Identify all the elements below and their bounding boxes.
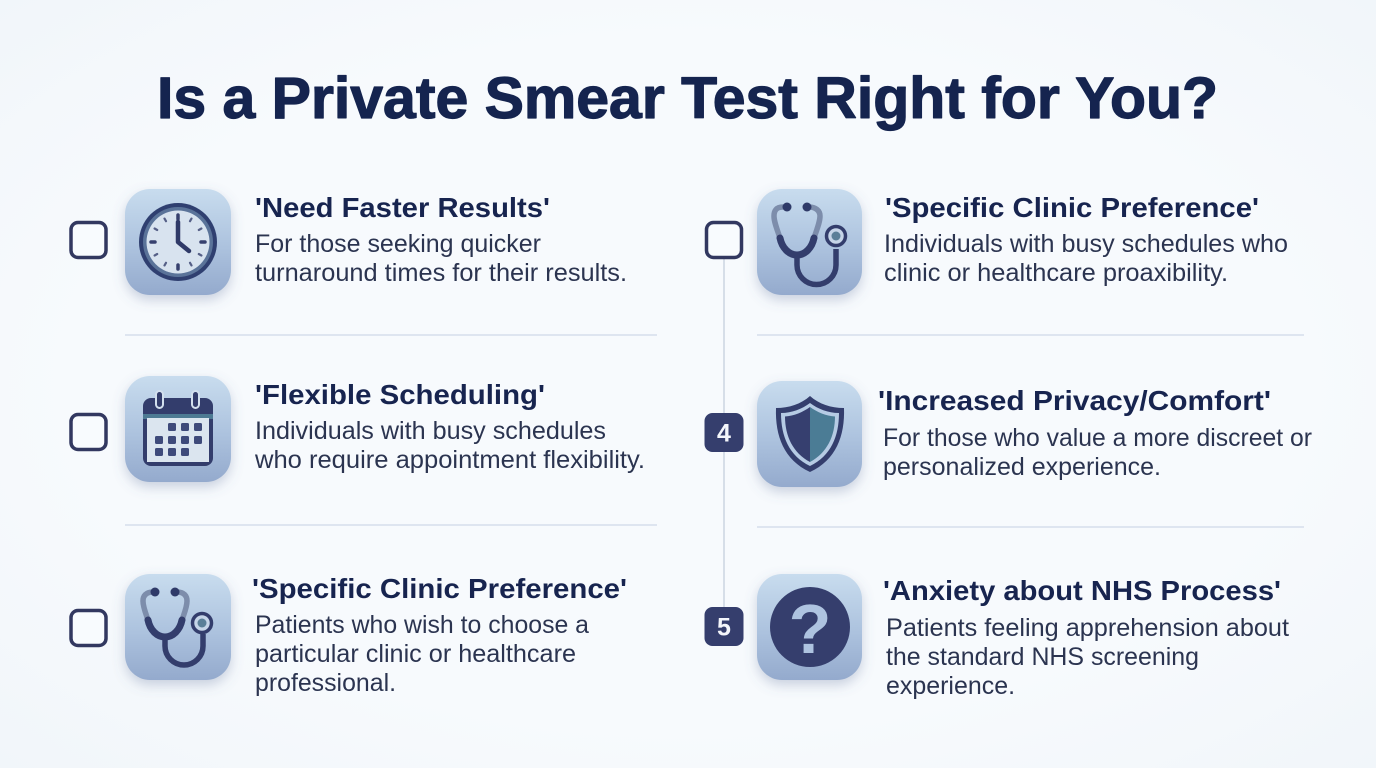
description: For those seeking quicker [255, 230, 541, 258]
panel: increased privacy/comfort [704, 381, 1312, 487]
heading: 'Flexible Scheduling' [255, 379, 545, 410]
title: Is a Private Smear Test Right for You? [157, 66, 1218, 131]
heading: 'Specific Clinic Preference' [885, 192, 1259, 223]
description: clinic or healthcare proaxibility. [884, 259, 1228, 287]
icon: clock [125, 189, 231, 295]
panel: specific clinic preference, right [706, 189, 1288, 295]
badge 5: 5 [717, 614, 731, 642]
description: who require appointment flexibility. [254, 446, 645, 474]
description: the standard NHS screening [886, 643, 1199, 671]
heading: 'Specific Clinic Preference' [252, 573, 627, 604]
heading: 'Increased Privacy/Comfort' [878, 385, 1271, 416]
checkbox 3 [71, 610, 106, 646]
description: Individuals with busy schedules who [884, 230, 1288, 258]
description: For those who value a more discreet or [883, 424, 1312, 452]
panel: specific clinic preference, left [71, 573, 627, 697]
checkbox 1 [71, 222, 106, 258]
panel: need faster results [71, 189, 627, 295]
badge 4: 4 [717, 420, 731, 448]
checkbox 4 [706, 222, 742, 258]
icon: stethoscope [125, 574, 231, 680]
panel: anxiety about NHS process [704, 574, 1289, 700]
icon: question mark [757, 574, 862, 680]
description: personalized experience. [883, 453, 1161, 481]
description: experience. [886, 672, 1015, 700]
badge 5 [704, 607, 744, 646]
description: professional. [255, 669, 396, 697]
icon: calendar [125, 376, 231, 482]
description: turnaround times for their results. [255, 259, 627, 287]
icon: stethoscope [757, 189, 862, 295]
icon: shield [757, 381, 862, 487]
heading: 'Need Faster Results' [255, 192, 550, 223]
description: Patients feeling apprehension about [886, 614, 1289, 642]
heading: 'Anxiety about NHS Process' [883, 575, 1281, 606]
icon: question mark: ? [789, 590, 831, 668]
badge 4 [704, 413, 744, 452]
checkbox 2 [71, 414, 106, 450]
description: Individuals with busy schedules [255, 417, 606, 445]
description: Patients who wish to choose a [255, 611, 589, 639]
description: particular clinic or healthcare [255, 640, 576, 668]
panel: flexible scheduling [71, 376, 645, 482]
